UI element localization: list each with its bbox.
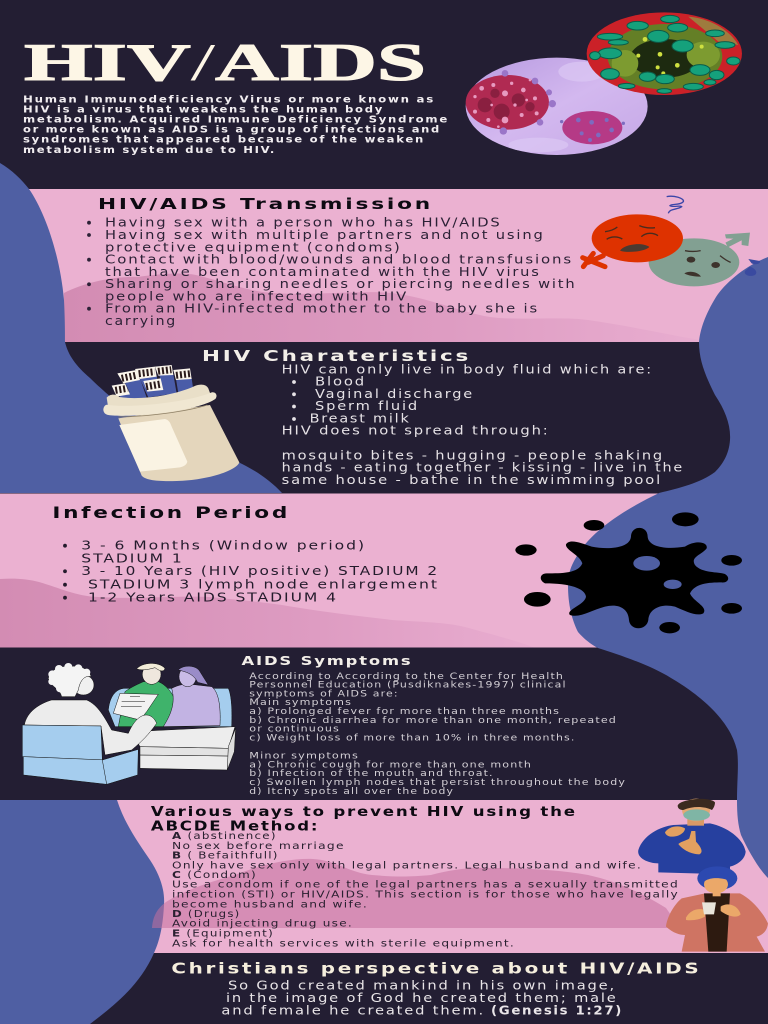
image: purple virus photo <box>466 58 648 155</box>
list: stages: 3 - 10 Years (HIV positive) STADIUM 2 <box>81 564 439 578</box>
title: HIV /AIDS <box>24 34 426 92</box>
band: infection period background <box>0 494 768 648</box>
text: ABCDE method: become husband and wife. <box>172 899 368 910</box>
intro text: metabolism. Acquired Immune Deficiency Syndrome <box>23 114 449 126</box>
heading: prevention: Various ways to prevent HIV using the <box>151 805 577 820</box>
blue shape: right side <box>568 257 768 878</box>
list: transmission: From an HIV-infected mother to the baby she is <box>105 302 539 316</box>
band: prevention background <box>0 800 768 953</box>
list: stages: 3 - 6 Months (Window period) <box>81 538 366 552</box>
image: green and red virus photo <box>587 12 742 95</box>
intro text: HIV is a virus that weakens the human body <box>23 104 384 116</box>
text: ABCDE method: Use a condom if one of the legal partners has a sexually transmitted <box>172 880 679 891</box>
text: ABCDE method: infection (STI) or HIV/AIDS. This section is for those who have legally <box>172 890 679 901</box>
text: body fluids and non-transmission: mosquito bites - hugging - people shaking <box>282 448 664 462</box>
text: symptoms <box>249 672 626 797</box>
text: symptoms: symptoms of AIDS are: <box>249 689 399 699</box>
list: transmission: Sharing or sharing needles or piercing needles with <box>105 277 576 291</box>
text: symptoms: b) Infection of the mouth and throat. <box>249 769 494 779</box>
text: ABCDE method: B ( Befaithfull) <box>172 850 279 861</box>
text: ABCDE method: E (Equipment) <box>172 928 274 939</box>
icon: black virus splat <box>515 512 742 633</box>
list: stages: STADIUM 1 <box>81 551 184 565</box>
text: body fluids and non-transmission: hands - eating together - kissing - live in the <box>282 461 684 475</box>
text: ABCDE method: Only have sex only with legal partners. Legal husband and wife. <box>172 860 642 871</box>
list: transmission: Having sex with a person who has HIV/AIDS <box>105 216 502 230</box>
text: symptoms: a) Prolonged fever for more than three months <box>249 707 560 717</box>
text: ABCDE method: A (abstinence) <box>172 831 277 842</box>
text: Genesis quote: in the image of God he created them; male <box>226 991 618 1005</box>
text: symptoms: Main symptoms <box>249 698 352 708</box>
text: ABCDE method <box>172 831 679 949</box>
intro text: metabolism system due to HIV. <box>23 145 276 156</box>
text: body fluids and non-transmission <box>282 362 684 487</box>
text: symptoms: Minor symptoms <box>249 751 359 761</box>
panel: HIV characteristics <box>202 347 684 487</box>
list: transmission: Contact with blood/wounds and blood transfusions <box>105 252 573 266</box>
text: body fluids and non-transmission: HIV can only live in body fluid which are: <box>282 362 653 376</box>
list: stages <box>63 538 439 604</box>
text: symptoms: d) Itchy spots all over the body <box>249 787 454 797</box>
text: symptoms: Personnel Education (Pusdiknakes-1997) clinical <box>249 680 567 690</box>
text: body fluids and non-transmission: Breast milk <box>310 411 411 425</box>
heading: infection period: Infection Period <box>52 503 290 522</box>
panel: Christian perspective <box>171 960 701 1017</box>
icon: sad gender emojis <box>583 196 760 286</box>
text: Genesis quote: (Genesis 1:27) <box>491 1003 623 1017</box>
illustration: doctor consultation <box>22 663 236 784</box>
text: ABCDE method: Avoid injecting drug use. <box>172 919 353 930</box>
heading: christian perspective: Christians perspective about HIV/AIDS <box>171 960 701 978</box>
text: Genesis quote <box>221 979 623 1017</box>
intro text <box>23 94 449 156</box>
list: transmission: people who are infected with HIV <box>105 289 408 303</box>
band: transmission background <box>0 189 768 342</box>
heading: prevention <box>151 805 577 834</box>
text: symptoms: b) Chronic diarrhea for more than one month, repeated <box>249 716 617 726</box>
list: transmission: that have been contaminated with the HIV virus <box>105 265 541 279</box>
list: transmission <box>87 216 576 328</box>
text: symptoms: or continuous <box>249 725 340 735</box>
panel: prevention ABCDE <box>151 805 679 949</box>
text: ABCDE method: Ask for health services with sterile equipment. <box>172 938 515 949</box>
text: symptoms: c) Swollen lymph nodes that persist throughout the body <box>249 778 626 788</box>
text: body fluids and non-transmission: Vaginal discharge <box>315 387 474 401</box>
icon: pill bottle with strips <box>103 365 239 481</box>
illustration: man in mask signing <box>638 799 746 874</box>
intro text: or more known as AIDS is a group of infections and <box>23 125 441 136</box>
text: body fluids and non-transmission: same house - bathe in the swimming pool <box>282 473 662 487</box>
text: body fluids and non-transmission: HIV does not spread through: <box>282 424 550 438</box>
list: transmission: protective equipment (condoms) <box>105 240 402 254</box>
blue shape: lower left <box>0 800 164 1024</box>
heading: characteristics: HIV Charateristics <box>202 347 471 365</box>
text: symptoms: According to According to the Center for Health <box>249 672 564 682</box>
text: symptoms: a) Chronic cough for more than one month <box>249 760 532 770</box>
intro text: Human Immunodeficiency Virus or more known as <box>23 94 435 106</box>
list: transmission: Having sex with multiple partners and not using <box>105 228 545 242</box>
panel: transmission <box>87 195 576 328</box>
text: Genesis quote: and female he created them. <box>221 1003 485 1017</box>
wave: prevention <box>152 859 680 928</box>
list: transmission: carrying <box>105 314 177 328</box>
text: ABCDE method: No sex before marriage <box>172 841 345 852</box>
heading: symptoms: AIDS Symptoms <box>242 653 412 668</box>
intro text: syndromes that appeared because of the weaken <box>23 135 425 146</box>
text: body fluids and non-transmission: Blood <box>315 375 366 389</box>
text: body fluids and non-transmission: Sperm fluid <box>315 399 419 413</box>
text: Genesis quote: So God created mankind in his own image, <box>228 979 616 993</box>
list: stages: STADIUM 3 lymph node enlargement <box>88 577 439 591</box>
list: stages: 1-2 Years AIDS STADIUM 4 <box>88 590 338 604</box>
illustration: woman with medicine <box>666 866 768 952</box>
text: ABCDE method: C (Condom) <box>172 870 257 881</box>
heading: transmission: HIV/AIDS Transmission <box>98 195 433 213</box>
heading: prevention: ABCDE Method: <box>151 819 319 834</box>
panel: AIDS symptoms <box>242 653 626 797</box>
panel: infection period <box>52 503 439 604</box>
text: ABCDE method: D (Drugs) <box>172 909 240 920</box>
text: symptoms: c) Weight loss of more than 10% in three months. <box>249 734 576 744</box>
blue shape: upper left <box>0 163 282 493</box>
